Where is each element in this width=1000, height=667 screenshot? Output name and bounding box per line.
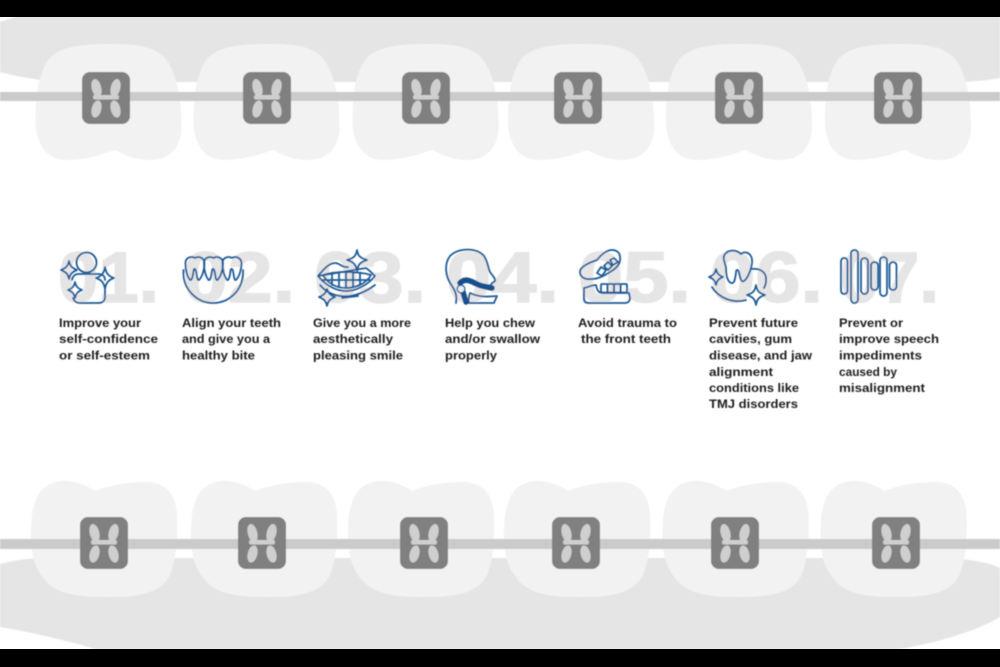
text: benefit 7: impediments [839,348,922,362]
text: benefit 3: pleasing smile [313,348,403,362]
text: benefit 3: Give you a more [313,316,411,330]
text: benefit 1: Improve your [59,316,141,330]
text: benefit 6: disease, and jaw [709,348,813,362]
text: benefit 2: healthy bite [182,348,255,362]
icon: speech sound bars [841,250,896,303]
text: benefit 5 [578,316,677,346]
text: benefit 1 [59,316,158,362]
text: benefit 2: and give you a [182,332,270,346]
lower gum [0,558,1000,649]
icon: aligned teeth [183,257,243,303]
large background numbers: 06. [710,239,823,318]
text: benefit 7: improve speech [839,332,939,346]
icon: smile with sparkles [318,250,375,306]
upper brackets [82,72,922,124]
text: benefit 7: misalignment [839,381,925,395]
text: benefit 6 [709,316,813,411]
text: benefit 6: cavities, gum [709,332,792,346]
text: benefit 6: conditions like [709,381,799,395]
upper teeth [36,44,971,160]
text: benefit 6: alignment [709,365,773,379]
text: benefit 4: properly [445,348,497,362]
large background numbers: 04. [446,239,559,318]
icon: tooth with sparkles [709,251,766,305]
text: benefit 1: or self-esteem [59,348,150,362]
bottom black bar [0,649,1000,667]
text: benefit 2 [182,316,281,362]
text: benefit 3 [313,316,411,362]
icon: person with sparkles [61,252,114,303]
upper wire [0,92,1000,101]
text: benefit 2: Align your teeth [182,316,281,330]
large background numbers: 07. [840,239,939,318]
large background numbers: 03. [314,239,426,318]
text: benefit 7 [839,316,939,395]
lower wire [0,539,1000,549]
text: benefit 7: Prevent or [839,316,903,330]
text: benefit 6: TMJ disorders [709,397,798,411]
text: benefit 3: aesthetically [313,332,393,346]
large background numbers: 05. [578,239,691,318]
upper gum [0,16,1000,82]
text: benefit 4 [445,316,541,362]
lower teeth [31,481,967,597]
text: benefit 4: Help you chew [445,316,536,330]
large background numbers [58,239,939,318]
text: benefit 6: Prevent future [709,316,798,330]
text: benefit 5: Avoid trauma to [578,316,677,330]
icon: dentures [580,250,630,303]
large background numbers: 01. [58,239,159,318]
text: benefit 7: caused by [839,365,897,379]
icon: head profile with jaw [446,250,497,303]
text: benefit 5: the front teeth [581,332,671,346]
lower brackets [80,517,920,569]
top black bar [0,0,1000,17]
large background numbers: 02. [183,239,295,318]
text: benefit 4: and/or swallow [445,332,541,346]
text: benefit 1: self-confidence [59,332,158,346]
